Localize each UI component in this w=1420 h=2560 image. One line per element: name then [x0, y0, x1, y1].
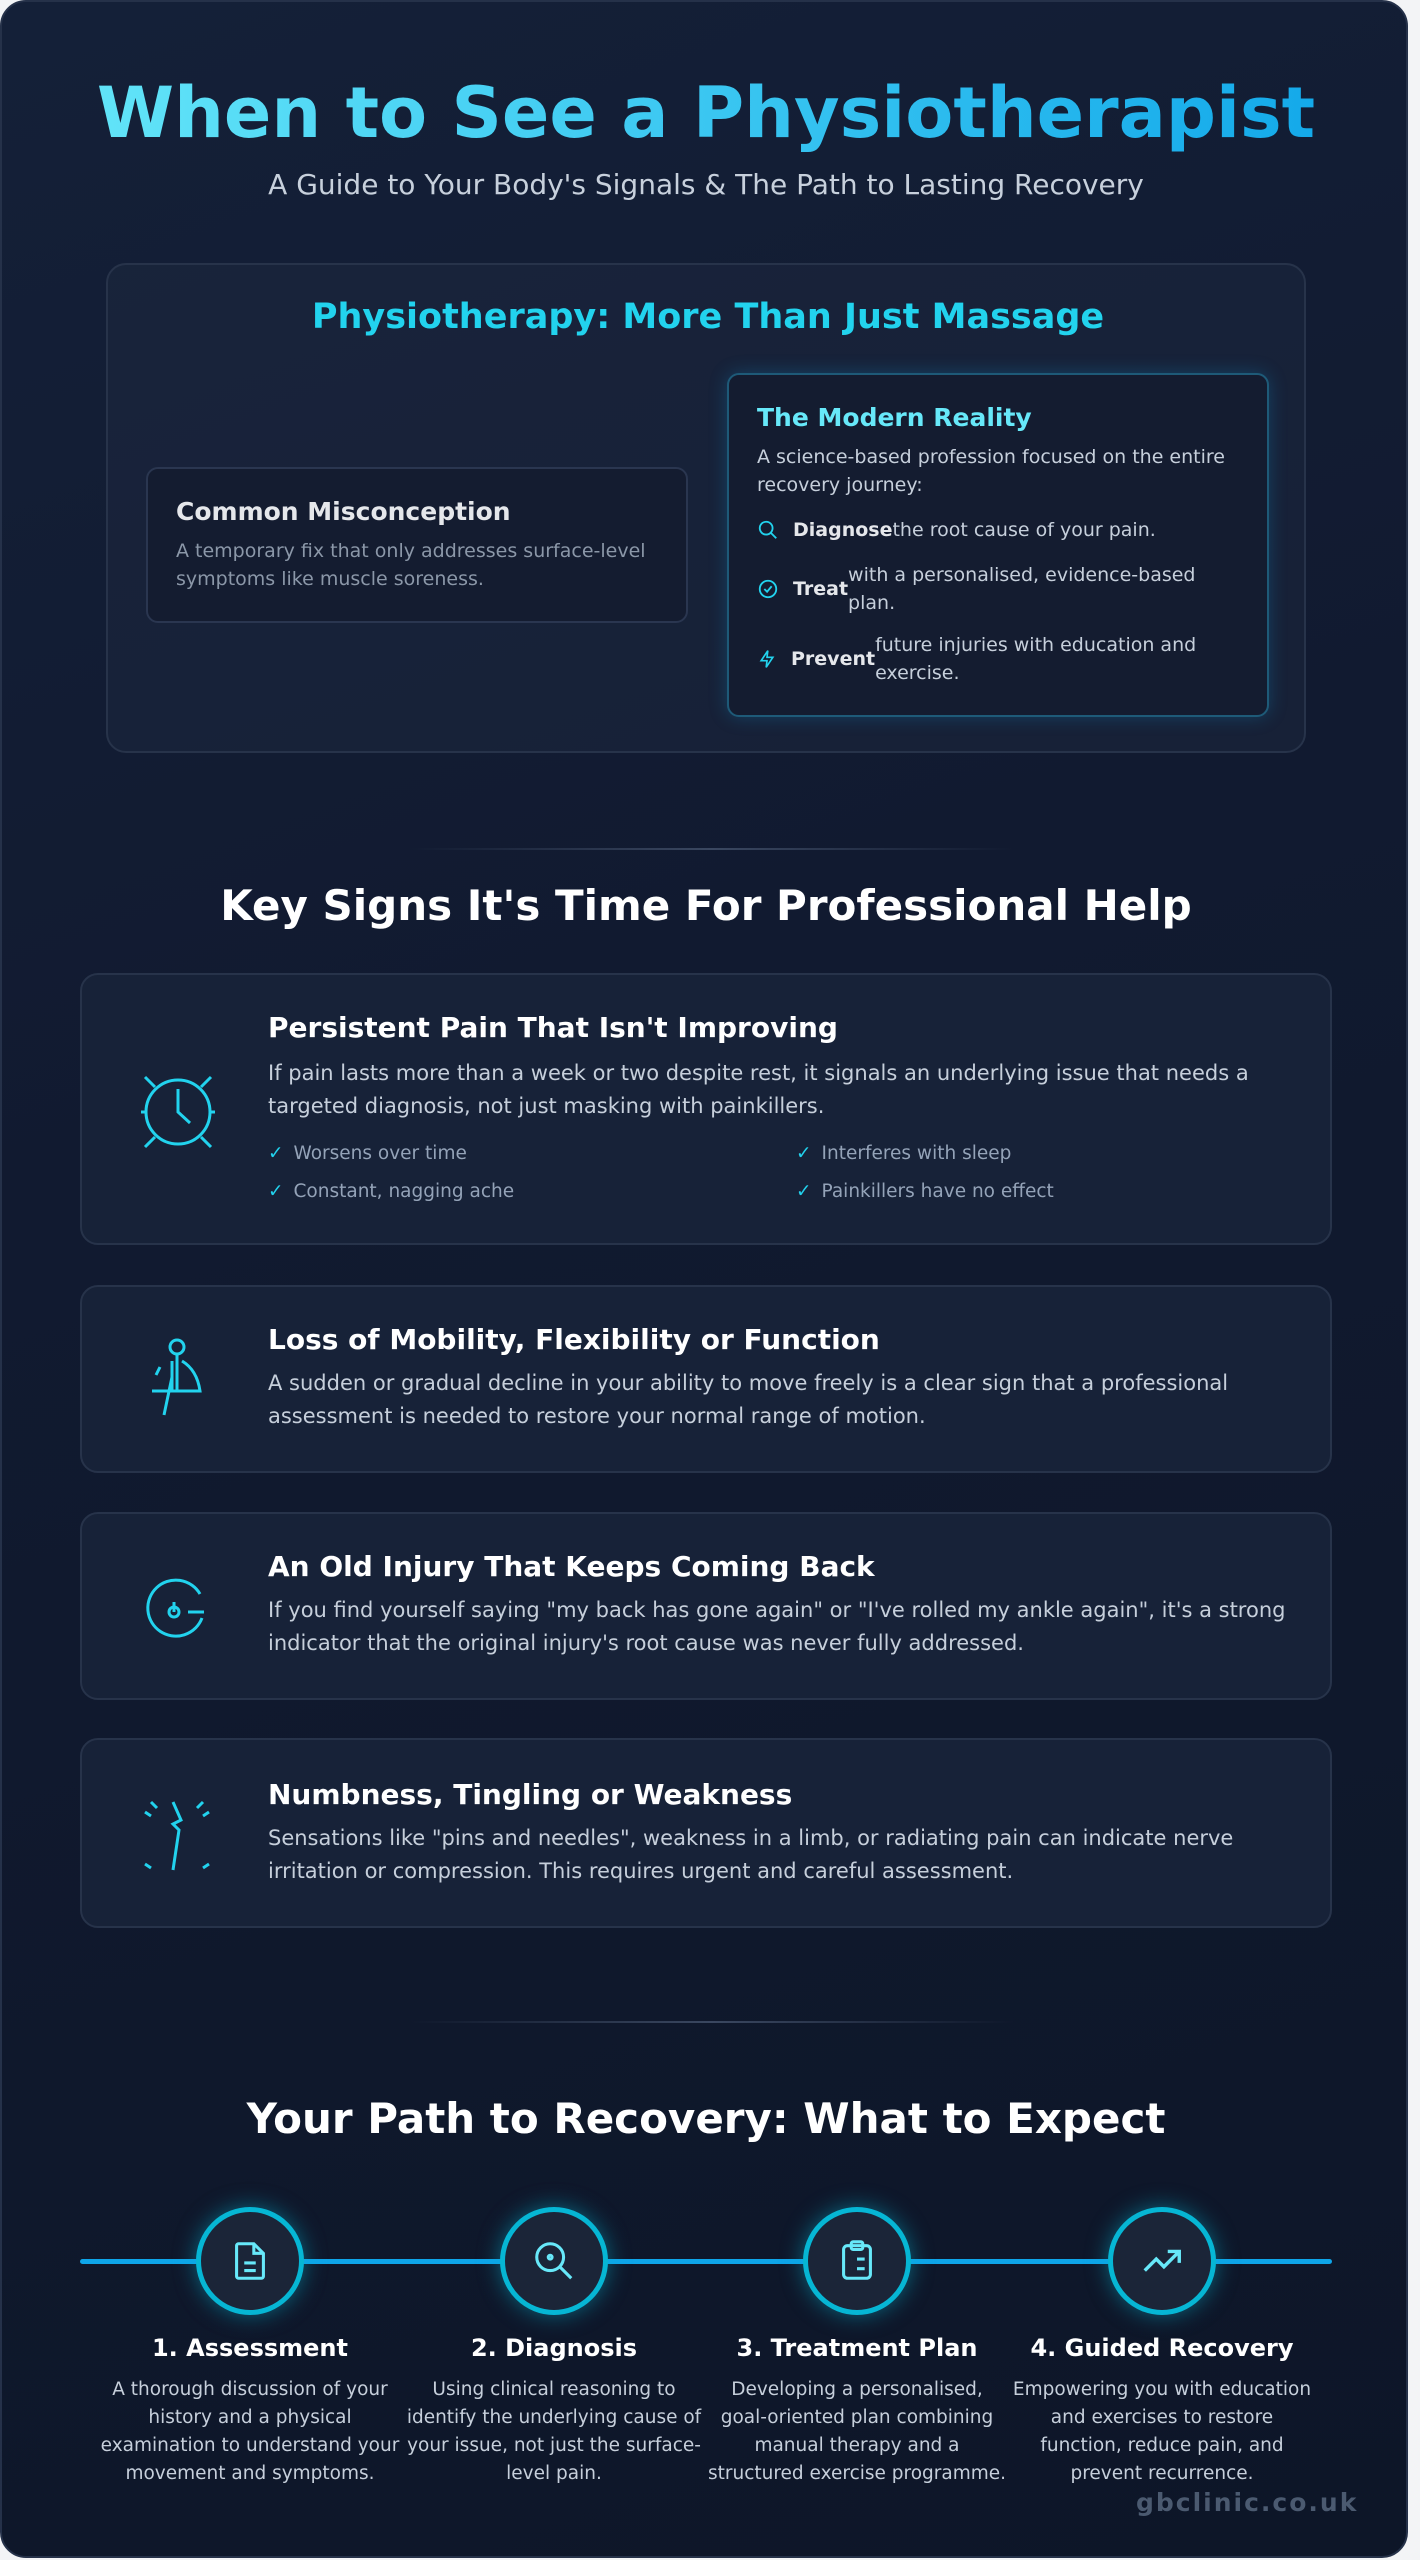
card title: An Old Injury That Keeps Coming Back: [268, 1550, 875, 1583]
box: modern reality: [727, 373, 1269, 717]
item: diagnose: [758, 519, 1156, 541]
checklist: ✓ Constant, nagging ache: [268, 1181, 514, 1202]
card title: Loss of Mobility, Flexibility or Function: [268, 1323, 880, 1356]
step 4: 4. Guided Recovery: [1030, 2334, 1294, 2362]
card text: If you find yourself saying "my back has gone again" or "I've rolled my ankle again", it's a strong indicator that the original injury's root cause was never fully addressed.: [268, 1598, 1285, 1655]
reality title: The Modern Reality: [757, 403, 1032, 432]
footer: website: gbclinic.co.uk: [1136, 2488, 1358, 2517]
step 3: Developing a personalised, goal-oriented plan combining manual therapy and a structured exercise programme.: [708, 2379, 1006, 2484]
timeline: [80, 2195, 1332, 2327]
checklist: ✓ Worsens over time: [268, 1143, 467, 1164]
step 1: 1. Assessment: [152, 2334, 348, 2362]
box: misconception: [146, 467, 688, 623]
heading: key signs: Key Signs It's Time For Professional Help: [220, 881, 1192, 930]
card text: A sudden or gradual decline in your ability to move freely is a clear sign that a professional assessment is needed to restore your normal range of motion.: [268, 1371, 1228, 1428]
item: treat: with a personalised, evidence-based plan.: [848, 564, 1195, 614]
step icon: recovery: [1108, 2207, 1216, 2315]
title: When to See a Physiotherapist: [97, 72, 1315, 154]
icon: nerve bolt: [144, 1801, 210, 1870]
subtitle: A Guide to Your Body's Signals & The Path to Lasting Recovery: [268, 168, 1144, 201]
step 1: A thorough discussion of your history and a physical examination to understand your movement and symptoms.: [101, 2379, 399, 2484]
checklist: ✓ Painkillers have no effect: [796, 1181, 1054, 1202]
heading: path to recovery: Your Path to Recovery: What to Expect: [247, 2094, 1165, 2143]
item: diagnose: Diagnose: [793, 519, 892, 541]
step 3: 3. Treatment Plan: [736, 2334, 977, 2362]
item: diagnose: the root cause of your pain.: [892, 519, 1156, 541]
icon: person: [152, 1338, 202, 1416]
step 1: [101, 2334, 400, 2484]
icon: recurring: [146, 1578, 204, 1638]
card title: Numbness, Tingling or Weakness: [268, 1778, 792, 1811]
misconception text: A temporary fix that only addresses surface-level symptoms like muscle soreness.: [176, 540, 646, 590]
step 2: Using clinical reasoning to identify the underlying cause of your issue, not just the surface-level pain.: [407, 2379, 701, 2484]
step icon: treatment plan: [803, 2207, 911, 2315]
card text: If pain lasts more than a week or two despite rest, it signals an underlying issue that needs a targeted diagnosis, not just masking with painkillers.: [268, 1061, 1249, 1118]
icon: alarm clock: [141, 1076, 215, 1148]
card text: Sensations like "pins and needles", weakness in a limb, or radiating pain can indicate nerve irritation or compression. This requires urgent and careful assessment.: [268, 1826, 1233, 1883]
item: prevent: future injuries with education and exercise.: [875, 634, 1196, 684]
step 4: Empowering you with education and exercises to restore function, reduce pain, and prevent recurrence.: [1013, 2379, 1311, 2484]
panel: more than massage: [106, 263, 1306, 753]
checklist: [268, 1143, 1054, 1202]
card: mobility: [80, 1285, 1332, 1473]
step icon: diagnosis: [500, 2207, 608, 2315]
step 2: [407, 2334, 702, 2484]
misconception title: Common Misconception: [176, 497, 511, 526]
item: treat: Treat: [793, 578, 848, 600]
panel heading: Physiotherapy: More Than Just Massage: [312, 297, 1104, 337]
item: prevent: Prevent: [791, 648, 875, 670]
card: persistent pain: [80, 973, 1332, 1245]
timeline line: [80, 2259, 1332, 2264]
card: numbness: [80, 1738, 1332, 1928]
step icon: assessment: [196, 2207, 304, 2315]
card title: Persistent Pain That Isn't Improving: [268, 1011, 838, 1044]
reality intro: A science-based profession focused on the entire recovery journey:: [757, 446, 1225, 496]
card: old injury: [80, 1512, 1332, 1700]
step 2: 2. Diagnosis: [471, 2334, 637, 2362]
checklist: ✓ Interferes with sleep: [796, 1143, 1011, 1164]
